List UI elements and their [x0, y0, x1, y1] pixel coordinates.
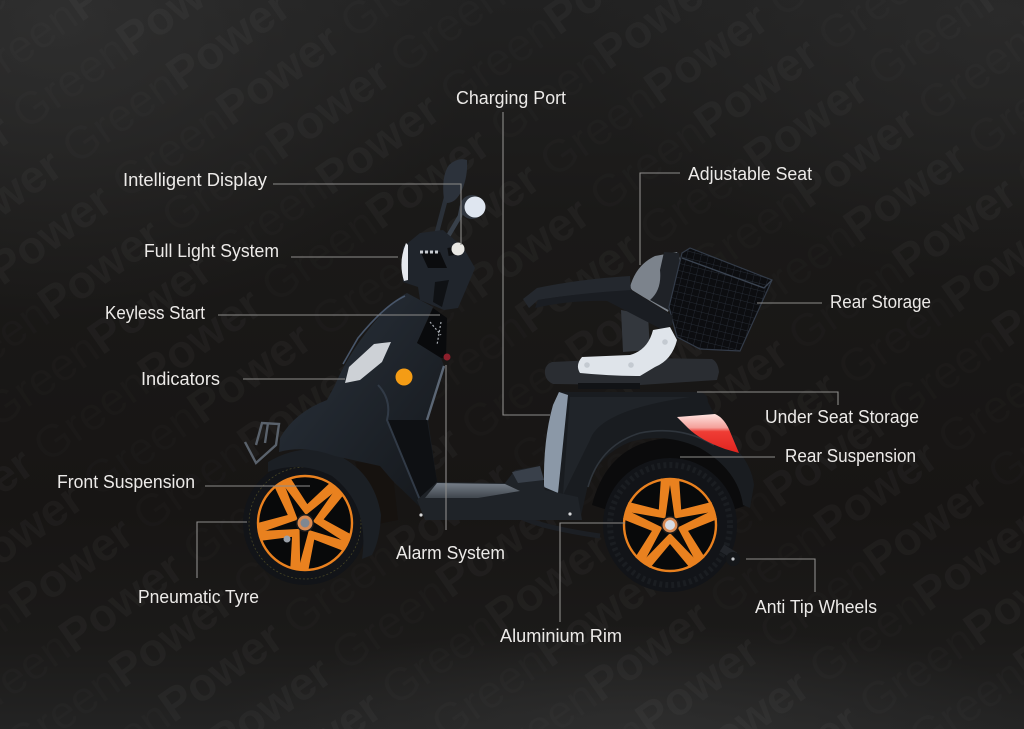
callout: Adjustable Seat [640, 164, 812, 265]
recess with key and wiring [417, 308, 450, 360]
callout: Charging Port: Charging Port [456, 88, 566, 108]
mobility scooter [243, 159, 772, 592]
icon: indicator lens [345, 342, 391, 383]
callout: Keyless Start: Keyless Start [105, 303, 205, 323]
front cowl and leg shield [279, 293, 450, 506]
icon: right mirror [447, 195, 486, 238]
icon: left mirror [437, 159, 467, 232]
armrest [523, 276, 673, 330]
callout: Anti Tip Wheels [746, 559, 877, 617]
callout: Charging Port [456, 88, 566, 415]
rear wheel well [592, 438, 748, 530]
storage basket [669, 248, 772, 351]
callout: Under Seat Storage: Under Seat Storage [765, 407, 919, 427]
callout: Front Suspension: Front Suspension [57, 472, 195, 492]
front fender [268, 450, 381, 559]
front basket bumper [245, 423, 279, 463]
handlebar head unit [401, 230, 475, 310]
seat cushion [545, 358, 719, 389]
callout: Pneumatic Tyre [138, 522, 259, 607]
rear body [544, 392, 754, 520]
silver side panel [544, 392, 568, 493]
callout: Pneumatic Tyre: Pneumatic Tyre [138, 587, 259, 607]
callout: Anti Tip Wheels: Anti Tip Wheels [755, 597, 877, 617]
front wheel [243, 461, 367, 585]
callout: Alarm System: Alarm System [396, 543, 505, 563]
under-floor arm [523, 518, 600, 536]
callout: Rear Suspension: Rear Suspension [785, 446, 916, 466]
seat post [621, 310, 650, 352]
callout: Full Light System: Full Light System [144, 241, 279, 261]
icon: orange reflector [396, 368, 412, 386]
callout: Intelligent Display [123, 170, 461, 245]
callout: Intelligent Display: Intelligent Display [123, 170, 267, 190]
front suspension recess [355, 462, 398, 524]
callout: Under Seat Storage [697, 392, 919, 427]
anti tip wheel [722, 548, 740, 566]
white armrest bracket [578, 327, 677, 376]
tail light [677, 414, 739, 453]
callout: Aluminium Rim: Aluminium Rim [500, 626, 622, 646]
backrest [630, 252, 682, 312]
rear wheel [603, 458, 737, 592]
callout: Rear Storage: Rear Storage [830, 292, 931, 312]
callout: Aluminium Rim [500, 523, 625, 646]
footboard [417, 466, 582, 520]
callout: Indicators: Indicators [141, 369, 220, 389]
callout: Adjustable Seat: Adjustable Seat [688, 164, 812, 184]
